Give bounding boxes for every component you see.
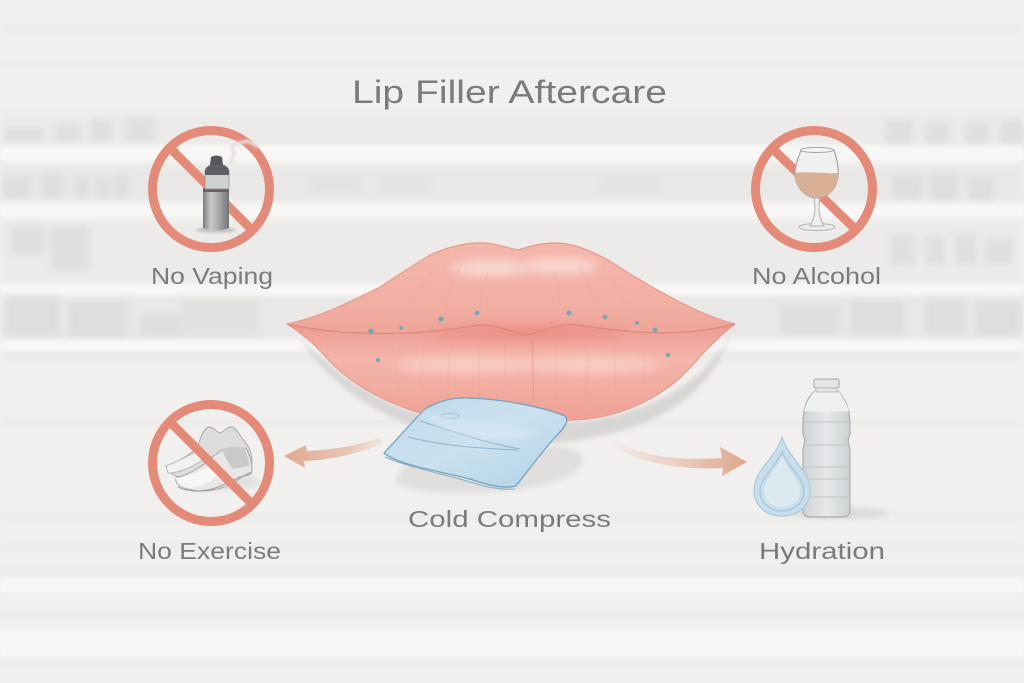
lip shading and highlights <box>395 258 660 374</box>
label: no exercise: No Exercise <box>138 538 281 564</box>
title: Lip Filler Aftercare <box>352 74 667 110</box>
lower lip <box>287 324 735 425</box>
arrow: right <box>615 441 747 476</box>
label: no vaping: No Vaping <box>151 263 273 289</box>
front sneaker <box>176 448 252 491</box>
icon: cold compress <box>384 398 582 494</box>
water bottle <box>803 379 850 517</box>
icon: no alcohol <box>756 130 872 248</box>
icon: hydration <box>754 379 890 519</box>
back sneaker <box>166 427 252 477</box>
lips shadow <box>298 335 730 444</box>
label: cold compress: Cold Compress <box>408 506 611 532</box>
injection dots <box>368 311 670 362</box>
label: no alcohol: No Alcohol <box>752 263 881 289</box>
lip wrinkles <box>396 262 644 414</box>
water drop <box>754 437 810 516</box>
arrow: left <box>284 437 382 468</box>
icon: no exercise <box>152 404 270 522</box>
icon: no vaping <box>152 130 270 248</box>
label: hydration: Hydration <box>759 538 885 564</box>
upper lip <box>287 243 735 336</box>
lips <box>287 243 735 425</box>
